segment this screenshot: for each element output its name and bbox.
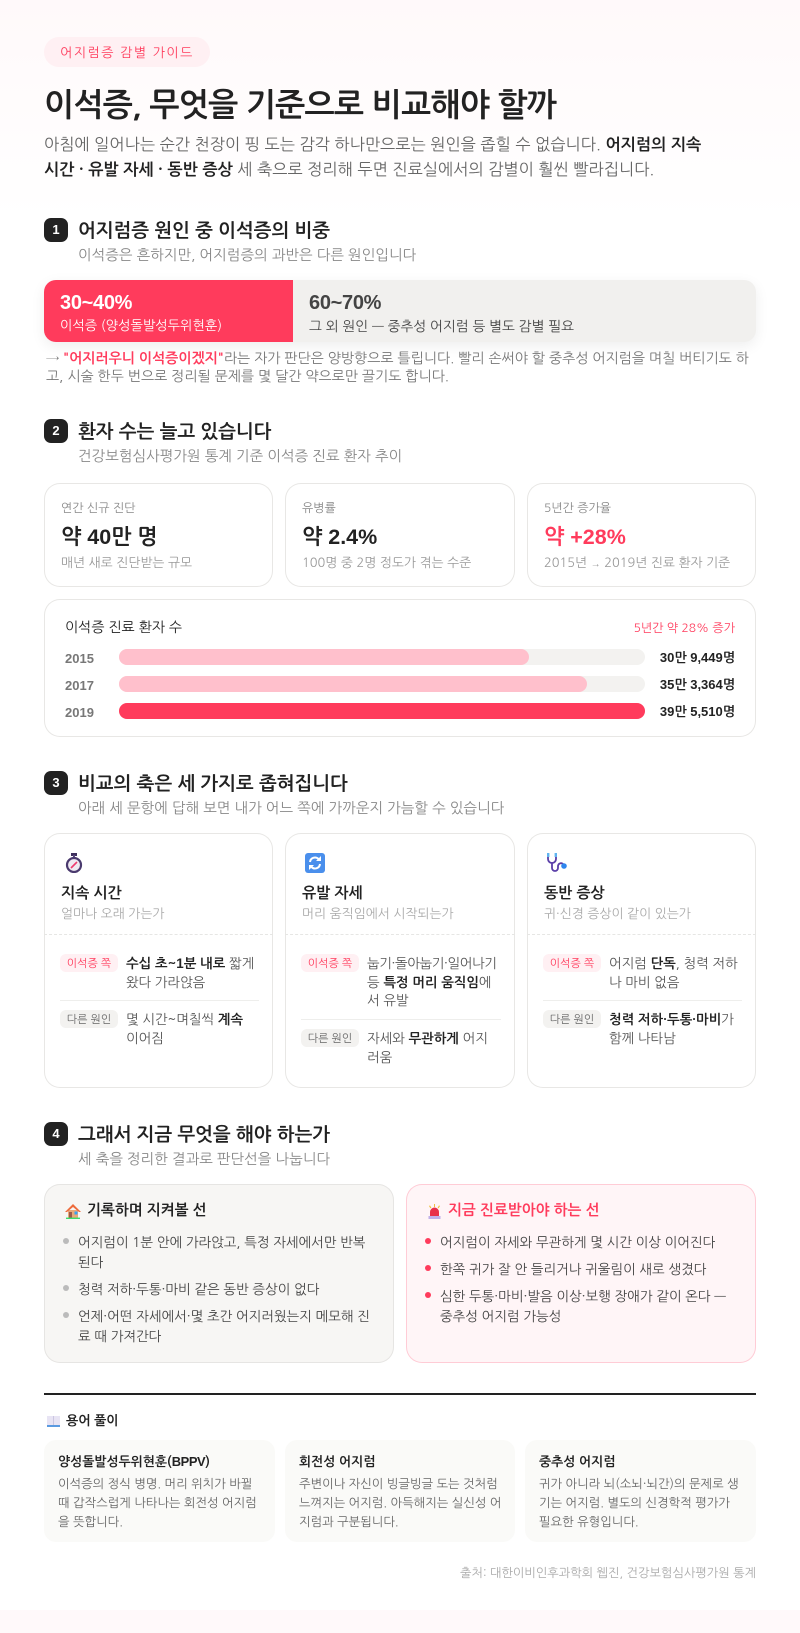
section 2 heading bbox=[44, 419, 402, 464]
panel: accompanying symptoms: 어지럼 단독, 청력 저하 bbox=[609, 957, 738, 970]
chart callout: 5년간 약 28% 증가 bbox=[634, 622, 735, 634]
intro text bbox=[44, 136, 701, 178]
segment: BPPV 30~40% bbox=[44, 280, 293, 342]
stat card: five-year growth: 약 +28% bbox=[544, 525, 626, 549]
number badge 2 bbox=[44, 419, 68, 443]
panel: duration: 다른 원인 bbox=[67, 1014, 111, 1025]
glossary: central vertigo: 귀가 아니라 뇌(소뇌·뇌간)의 문제로 생 bbox=[539, 1477, 739, 1490]
glossary heading text: 용어 풀이 bbox=[66, 1414, 119, 1427]
stat card: annual new diagnoses: 약 40만 명 bbox=[61, 525, 158, 549]
subheading 2: 건강보험심사평가원 통계 기준 이석증 진료 환자 추이 bbox=[78, 450, 402, 464]
glossary: central vertigo: 중추성 어지럼 bbox=[539, 1455, 615, 1468]
panel: accompanying symptoms: 다른 원인 bbox=[550, 1014, 594, 1025]
number badge 1: 1 bbox=[52, 222, 60, 237]
glossary: vertigo bbox=[285, 1440, 515, 1542]
section 4 heading bbox=[44, 1122, 330, 1167]
stat card: prevalence bbox=[285, 483, 515, 587]
panel: watch and record: 료 때 가져간다 bbox=[78, 1329, 161, 1343]
panel: watch and record: 된다 bbox=[78, 1255, 103, 1269]
panel: trigger posture: 자세와 무관하게 어지 bbox=[367, 1032, 488, 1045]
segment: others 60~70%: 그 외 원인 — 중추성 어지럼 등 별도 감별 필요 bbox=[309, 319, 574, 333]
icon: repeat arrows bbox=[305, 853, 325, 873]
panel: trigger posture: 머리 움직임에서 시작되는가 bbox=[302, 907, 454, 920]
panel: duration: 이어짐 bbox=[126, 1032, 164, 1044]
subheading 4: 세 축을 정리한 결과로 판단선을 나눕니다 bbox=[78, 1153, 330, 1167]
panel: accompanying symptoms: 동반 증상 bbox=[544, 886, 605, 901]
row 2015: 2015 bbox=[65, 651, 94, 666]
panel: trigger posture: 유발 자세 bbox=[302, 886, 363, 901]
glossary: vertigo: 느껴지는 어지럼. 아득해지는 실신성 어 bbox=[299, 1496, 501, 1509]
glossary: vertigo: 주변이나 자신이 빙글빙글 도는 것처럼 bbox=[299, 1477, 498, 1490]
glossary: central vertigo: 필요한 유형입니다. bbox=[539, 1515, 639, 1528]
panel: watch and record: 언제·어떤 자세에서·몇 초간 어지러웠는지 메모해 진 bbox=[78, 1309, 370, 1323]
number badge 3: 3 bbox=[52, 775, 60, 790]
panel: trigger posture: 서 유발 bbox=[367, 994, 409, 1007]
panel: watch and record: 어지럼이 1분 안에 가라앉고, 특정 자세에서만 반복 bbox=[78, 1235, 365, 1249]
panel: duration: 수십 초~1분 내로 짧게 bbox=[126, 956, 254, 971]
panel: accompanying symptoms bbox=[527, 833, 756, 1088]
icon: open book bbox=[47, 1416, 60, 1427]
panel: watch and record bbox=[44, 1184, 394, 1363]
panel: accompanying symptoms: 청력 저하·두통·마비가 bbox=[609, 1013, 734, 1026]
panel: duration: 왔다 가라앉음 bbox=[126, 976, 205, 988]
row 2019: 2019 bbox=[65, 705, 94, 720]
panel heading: 기록하며 지켜볼 선 bbox=[87, 1204, 207, 1218]
icon: stopwatch bbox=[66, 853, 82, 873]
stat card: prevalence: 약 2.4% bbox=[302, 525, 377, 549]
panel: duration: 얼마나 오래 가는가 bbox=[61, 907, 164, 920]
panel: duration: 몇 시간~며칠씩 계속 bbox=[126, 1013, 243, 1026]
segment: BPPV 30~40%: 30~40% bbox=[60, 292, 132, 314]
panel: duration: 이석증 쪽 bbox=[67, 958, 111, 969]
panel: trigger posture bbox=[285, 833, 515, 1088]
panel: accompanying symptoms: 함께 나타남 bbox=[609, 1032, 676, 1044]
segment: others 60~70%: 60~70% bbox=[309, 292, 381, 314]
icon: siren bbox=[428, 1204, 440, 1219]
panel: watch and record: 청력 저하·두통·마비 같은 동반 증상이 없다 bbox=[78, 1282, 319, 1296]
glossary: BPPV: 때 갑작스럽게 나타나는 회전성 어지럼 bbox=[58, 1496, 257, 1509]
bar chart: patients by year: 30만 9,449명 bbox=[660, 650, 735, 665]
note under share bar bbox=[46, 351, 749, 384]
stat card: five-year growth: 2015년 → 2019년 진료 환자 기준 bbox=[544, 556, 730, 570]
subheading 3: 아래 세 문항에 답해 보면 내가 어느 쪽에 가까운지 가늠할 수 있습니다 bbox=[78, 802, 504, 816]
share bar: BPPV vs others bbox=[44, 280, 756, 342]
panel: see a doctor now: 한쪽 귀가 잘 안 들리거나 귀울림이 새로 생겼다 bbox=[440, 1262, 706, 1276]
section 1 heading bbox=[44, 218, 416, 263]
intro text: 시간 · 유발 자세 · 동반 증상 세 축으로 정리해 두면 진료실에서의 감별이 훨씬 빨라집니다. bbox=[44, 162, 654, 178]
glossary: central vertigo bbox=[525, 1440, 756, 1542]
heading 2 text: 환자 수는 늘고 있습니다 bbox=[78, 422, 271, 441]
glossary: BPPV: 이석증의 정식 병명. 머리 위치가 바뀔 bbox=[58, 1477, 252, 1490]
segment: others 60~70% bbox=[309, 292, 574, 333]
panel: duration bbox=[44, 833, 273, 1088]
bar chart: patients by year: 35만 3,364명 bbox=[660, 677, 735, 692]
panel: see a doctor now: 중추성 어지럼 가능성 bbox=[440, 1309, 561, 1323]
glossary: vertigo: 회전성 어지럼 bbox=[299, 1455, 375, 1468]
stat card: five-year growth: 5년간 증가율 bbox=[544, 502, 611, 514]
section 3 heading bbox=[44, 771, 504, 816]
glossary: central vertigo: 기는 어지럼. 별도의 신경학적 평가가 bbox=[539, 1496, 730, 1509]
segment: BPPV 30~40%: 이석증 (양성돌발성두위현훈) bbox=[60, 319, 222, 332]
source line: 출처: 대한이비인후과학회 웹진, 건강보험심사평가원 통계 bbox=[460, 1567, 756, 1579]
panel: see a doctor now: 어지럼이 자세와 무관하게 몇 시간 이상 이어진다 bbox=[440, 1235, 715, 1249]
number badge 2: 2 bbox=[52, 423, 60, 438]
stat card: annual new diagnoses: 연간 신규 진단 bbox=[61, 502, 135, 514]
stat card: prevalence: 유병률 bbox=[302, 502, 336, 514]
glossary: BPPV: 양성돌발성두위현훈(BPPV) bbox=[58, 1454, 210, 1469]
number badge 4 bbox=[44, 1122, 68, 1146]
note under share bar: → "어지러우니 이석증이겠지"라는 자가 판단은 양방향으로 틀립니다. 빨리 손써야 할 중추성 어지럼을 며칠 버티기도 하 bbox=[46, 352, 749, 366]
panel: accompanying symptoms: 나 마비 없음 bbox=[609, 976, 679, 988]
note under share bar: 고, 시술 한두 번으로 정리될 문제를 몇 달간 약으로만 끌기도 합니다. bbox=[46, 370, 449, 384]
stat card: five-year growth bbox=[527, 483, 756, 587]
heading 1 text: 어지럼증 원인 중 이석증의 비중 bbox=[78, 221, 330, 240]
panel: trigger posture: 눕기·돌아눕기·일어나기 bbox=[367, 957, 496, 970]
stat card: prevalence: 100명 중 2명 정도가 겪는 수준 bbox=[302, 556, 471, 569]
icon: stethoscope bbox=[547, 853, 567, 872]
panel: trigger posture: 등 특정 머리 움직임에 bbox=[367, 976, 492, 988]
panel: see a doctor now: 심한 두통·마비·발음 이상·보행 장애가 같이 온다 — bbox=[440, 1289, 726, 1303]
bar chart: patients by year bbox=[44, 599, 756, 737]
title: 이석증, 무엇을 기준으로 비교해야 할까 bbox=[44, 89, 556, 121]
glossary: BPPV bbox=[44, 1440, 275, 1542]
panel: duration: 지속 시간 bbox=[61, 886, 122, 901]
panel heading: 지금 진료받아야 하는 선 bbox=[448, 1204, 600, 1218]
number badge 3 bbox=[44, 771, 68, 795]
glossary: BPPV: 을 뜻합니다. bbox=[58, 1515, 123, 1528]
subheading 1: 이석증은 흔하지만, 어지럼증의 과반은 다른 원인입니다 bbox=[78, 249, 416, 263]
row 2017: 2017 bbox=[65, 678, 94, 693]
panel: trigger posture: 러움 bbox=[367, 1050, 392, 1064]
icon: house bbox=[65, 1204, 81, 1219]
number badge 4: 4 bbox=[52, 1126, 60, 1141]
bar chart: patients by year: 39만 5,510명 bbox=[660, 704, 735, 719]
badge: guide label: 어지럼증 감별 가이드 bbox=[60, 46, 194, 59]
stat card: annual new diagnoses bbox=[44, 483, 273, 587]
heading 3 text: 비교의 축은 세 가지로 좁혀집니다 bbox=[78, 774, 348, 793]
chart title: 이석증 진료 환자 수 bbox=[65, 621, 182, 635]
panel: trigger posture: 이석증 쪽 bbox=[308, 958, 352, 969]
panel: accompanying symptoms: 이석증 쪽 bbox=[550, 958, 594, 969]
badge: guide label bbox=[44, 37, 210, 67]
glossary heading bbox=[47, 1414, 119, 1427]
heading 4 text: 그래서 지금 무엇을 해야 하는가 bbox=[78, 1125, 330, 1144]
number badge 1 bbox=[44, 218, 68, 242]
panel: see a doctor now bbox=[406, 1184, 756, 1363]
panel: trigger posture: 다른 원인 bbox=[308, 1033, 352, 1044]
intro text: 아침에 일어나는 순간 천장이 핑 도는 감각 하나만으로는 원인을 좁힐 수 없습니다. 어지럼의 지속 bbox=[44, 137, 701, 153]
panel: accompanying symptoms: 귀·신경 증상이 같이 있는가 bbox=[544, 907, 691, 920]
stat card: annual new diagnoses: 매년 새로 진단받는 규모 bbox=[61, 556, 192, 569]
glossary: vertigo: 지럼과 구분됩니다. bbox=[299, 1515, 399, 1528]
